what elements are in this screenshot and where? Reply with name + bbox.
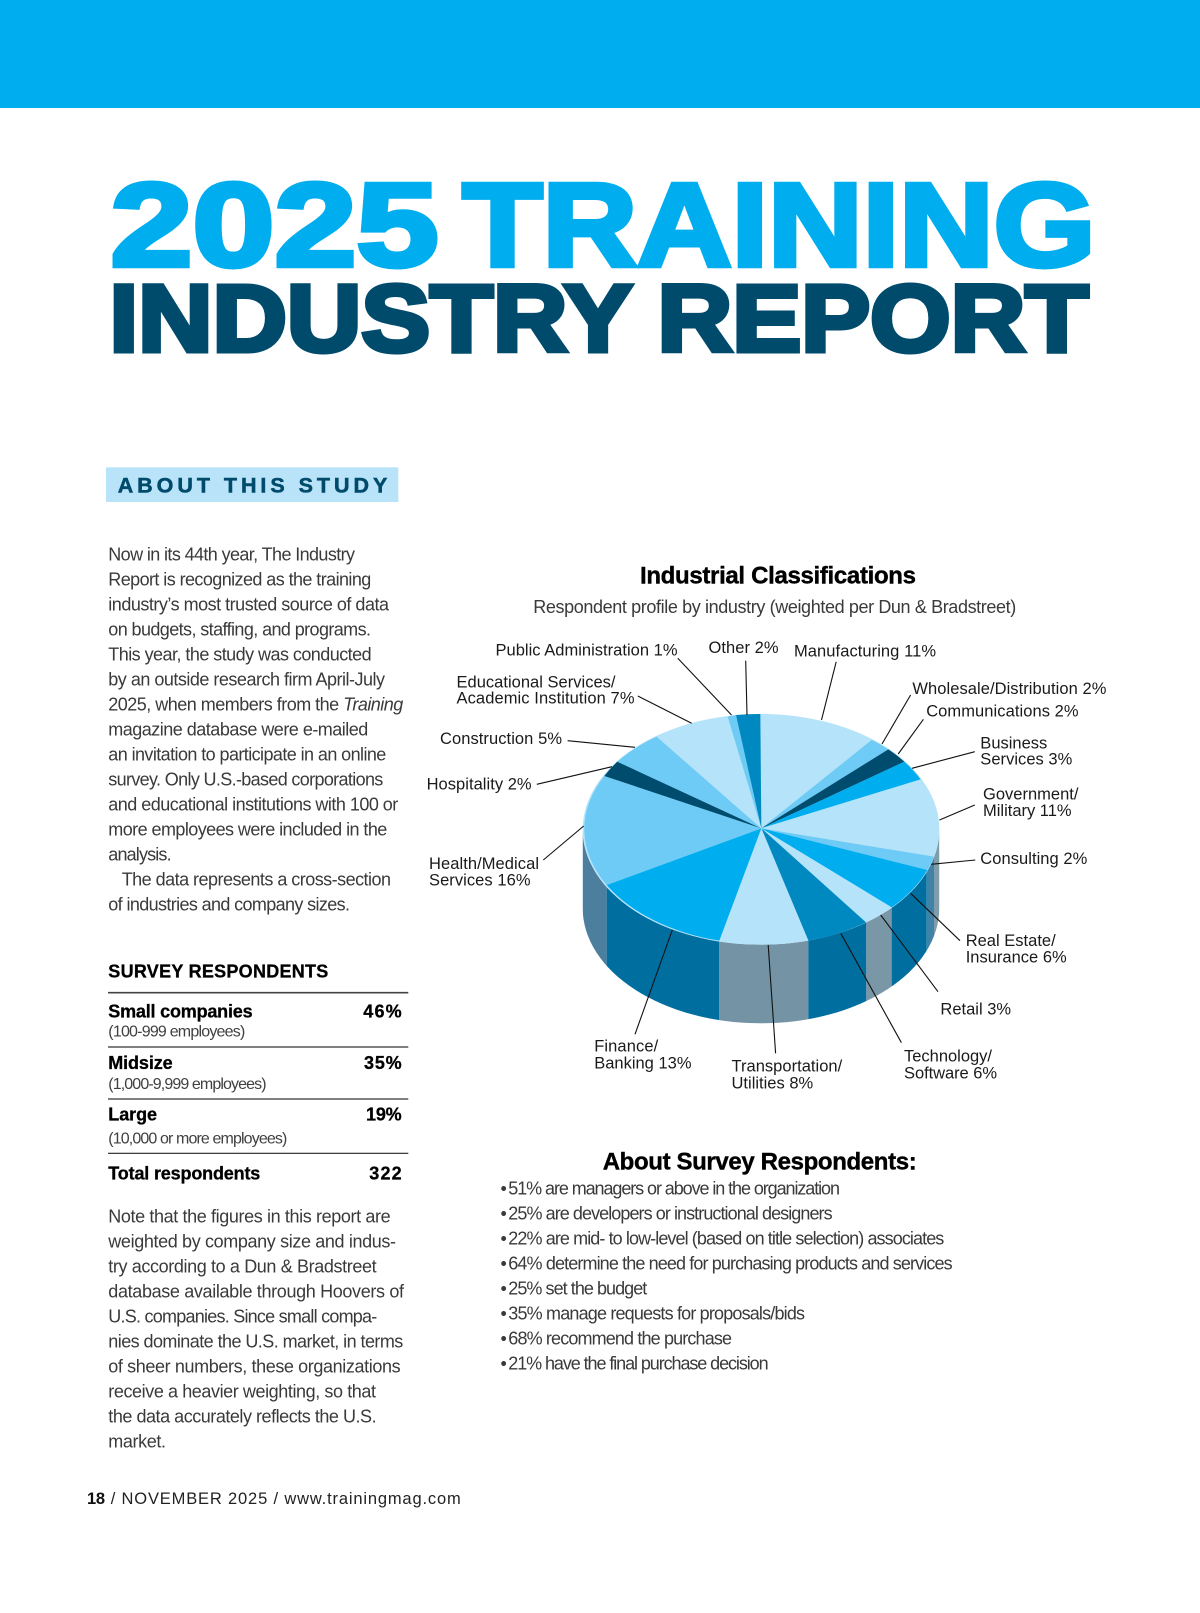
pie labels: Real Estate/ — [966, 932, 1056, 950]
bullet list: respondent facts: 35% manage requests for proposals/bids — [508, 1304, 805, 1324]
bullet list: respondent facts: • — [500, 1228, 507, 1248]
text block: weighting note — [107, 1207, 405, 1452]
title: TRAINING — [462, 160, 1096, 292]
top banner — [0, 0, 1200, 108]
section tag: about this study: ABOUT THIS STUDY — [118, 474, 387, 498]
pie labels: Services 16% — [429, 872, 531, 890]
heading: about survey respondents: About Survey Respondents: — [603, 1148, 917, 1175]
pie labels: Retail 3% — [940, 1000, 1011, 1018]
slice: manufacturing 11% — [760, 714, 872, 828]
bullet list: respondent facts: • — [500, 1328, 507, 1348]
slice: construction 5% — [617, 737, 761, 828]
pie labels: Banking 13% — [594, 1054, 692, 1072]
text block: weighting note: try according to a Dun & Bradstreet — [108, 1257, 377, 1277]
row: total respondents: 322 — [369, 1163, 402, 1183]
row: large: Large — [108, 1105, 157, 1125]
row: midsize: 35% — [364, 1053, 402, 1073]
text block: study description: more employees were included in the — [108, 820, 387, 840]
text block: study description: by an outside research firm April-July — [108, 670, 385, 690]
pie labels: Finance/ — [594, 1038, 659, 1056]
pie labels: Construction 5% — [440, 730, 562, 748]
slice: other 2% — [736, 714, 761, 828]
row: total respondents: Total respondents — [108, 1163, 260, 1183]
text block: weighting note: receive a heavier weighting, so that — [108, 1382, 376, 1402]
bullet list: respondent facts: 25% set the budget — [508, 1278, 647, 1298]
text block: study description — [108, 545, 403, 915]
text block: weighting note: nies dominate the U.S. market, in terms — [108, 1332, 403, 1352]
slice: wholesale/distribution 2% — [761, 740, 888, 828]
slice: retail 3% — [761, 828, 892, 922]
slice: hospitality 2% — [604, 762, 761, 828]
pie labels: Software 6% — [904, 1064, 997, 1082]
chart heading: Industrial Classifications — [640, 562, 916, 589]
slice: business services 3% — [761, 762, 921, 828]
pie labels: Wholesale/Distribution 2% — [912, 680, 1107, 698]
slice: transportation/utilities 8% — [719, 828, 808, 944]
bullet list: respondent facts: 25% are developers or instructional designers — [508, 1204, 833, 1224]
pie labels: Consulting 2% — [980, 850, 1088, 868]
slice: finance/banking 13% — [607, 828, 761, 941]
slice: consulting 2% — [761, 828, 934, 870]
footer: / NOVEMBER 2025 / www.trainingmag.com — [111, 1490, 461, 1508]
bullet list: respondent facts: • — [500, 1304, 507, 1324]
text block: study description: Report is recognized as the training — [108, 570, 371, 590]
slice: educational services 7% — [657, 717, 761, 828]
row: small companies: 46% — [363, 1001, 402, 1021]
row: small companies: Small companies — [108, 1001, 253, 1021]
bullet list: respondent facts: • — [500, 1278, 507, 1298]
pie labels: Health/Medical — [429, 855, 539, 873]
text block: study description: industry’s most trusted source of data — [108, 595, 390, 615]
row: large: 19% — [366, 1105, 402, 1125]
text block: study description: on budgets, staffing, and programs. — [108, 620, 371, 640]
pie labels: Public Administration 1% — [496, 642, 678, 660]
text block: study description: 2025, when members from the Training — [108, 695, 403, 715]
pie side wall — [580, 823, 941, 1030]
text block: study description: Now in its 44th year, The Industry — [108, 545, 355, 565]
row: total respondents — [108, 1163, 402, 1183]
pie labels: Hospitality 2% — [427, 775, 532, 793]
pie labels: Insurance 6% — [966, 949, 1067, 967]
bullet list: respondent facts: 64% determine the need for purchasing products and services — [508, 1254, 953, 1274]
pie labels — [427, 639, 1107, 1092]
text block: weighting note: the data accurately reflects the U.S. — [108, 1407, 377, 1427]
bullet list: respondent facts: • — [500, 1254, 507, 1274]
title: 2025 — [110, 160, 438, 292]
text block: study description: survey. Only U.S.-based corporations — [108, 770, 383, 790]
text block: study description: The data represents a cross-section — [122, 870, 391, 890]
table heading: SURVEY RESPONDENTS — [108, 962, 328, 982]
pie labels: Business — [980, 734, 1047, 752]
bullet list: respondent facts: • — [500, 1354, 507, 1374]
bullet list: respondent facts: • — [500, 1204, 507, 1224]
row: midsize: (1,000-9,999 employees) — [108, 1076, 267, 1093]
text block: weighting note: database available through Hoovers of — [108, 1282, 405, 1302]
section tag: about this study — [106, 467, 398, 502]
row: small companies: (100-999 employees) — [108, 1024, 245, 1041]
text block: weighting note: market. — [108, 1432, 166, 1452]
slice: real estate/insurance 6% — [761, 828, 927, 907]
title: REPORT — [658, 266, 1088, 372]
bullet list: respondent facts: 22% are mid- to low-level (based on title selection) associates — [508, 1228, 944, 1248]
pie labels: Military 11% — [983, 802, 1072, 820]
pie chart: industrial classifications — [427, 639, 1107, 1092]
pie labels: Other 2% — [708, 639, 779, 657]
text block: weighting note: of sheer numbers, these organizations — [108, 1357, 401, 1377]
text block: study description: of industries and company sizes. — [108, 895, 350, 915]
row: large: (10,000 or more employees) — [108, 1130, 287, 1147]
leader lines — [537, 658, 975, 1053]
bullet list: respondent facts: • — [500, 1178, 507, 1198]
text block: study description: an invitation to participate in an online — [108, 745, 386, 765]
pie labels: Government/ — [983, 785, 1079, 803]
slice: communications 2% — [761, 749, 904, 828]
pie labels: Educational Services/ — [456, 673, 616, 691]
text block: weighting note: Note that the figures in this report are — [108, 1207, 391, 1227]
row: midsize — [108, 1053, 402, 1093]
slice: health/medical services 16% — [584, 776, 761, 885]
pie top slices — [583, 714, 939, 945]
bullet list: respondent facts — [500, 1178, 953, 1374]
pie labels: Utilities 8% — [732, 1074, 814, 1092]
slice: public administration 1% — [728, 715, 761, 828]
pie labels: Communications 2% — [926, 703, 1079, 721]
title: INDUSTRY — [110, 266, 632, 372]
row: small companies — [108, 1001, 402, 1041]
pie labels: Services 3% — [980, 750, 1073, 768]
table: survey respondents — [108, 962, 408, 1183]
bullet list: respondent facts: 51% are managers or above in the organization — [508, 1178, 840, 1198]
text block: weighting note: U.S. companies. Since small compa- — [108, 1307, 377, 1327]
pie labels: Manufacturing 11% — [794, 643, 936, 661]
text block: study description: magazine database were e-mailed — [108, 720, 368, 740]
chart subtitle: Respondent profile by industry (weighted per Dun & Bradstreet) — [533, 597, 1016, 617]
slice: government/military 11% — [761, 779, 939, 857]
slice: technology/software 6% — [761, 828, 866, 941]
pie labels: Technology/ — [904, 1048, 992, 1066]
footer: 18 — [87, 1490, 105, 1508]
text block: study description: and educational institutions with 100 or — [108, 795, 398, 815]
text block: weighting note: weighted by company size and indus- — [107, 1232, 396, 1252]
row: midsize: Midsize — [108, 1053, 173, 1073]
title — [110, 160, 1096, 372]
pie labels: Academic Institution 7% — [456, 689, 635, 707]
text block: study description: analysis. — [108, 845, 172, 865]
pie labels: Transportation/ — [732, 1058, 843, 1076]
text block: study description: This year, the study was conducted — [108, 645, 372, 665]
bullet list: respondent facts: 21% have the final purchase decision — [508, 1354, 769, 1374]
row: large — [108, 1105, 402, 1147]
bullet list: respondent facts: 68% recommend the purchase — [508, 1328, 732, 1348]
